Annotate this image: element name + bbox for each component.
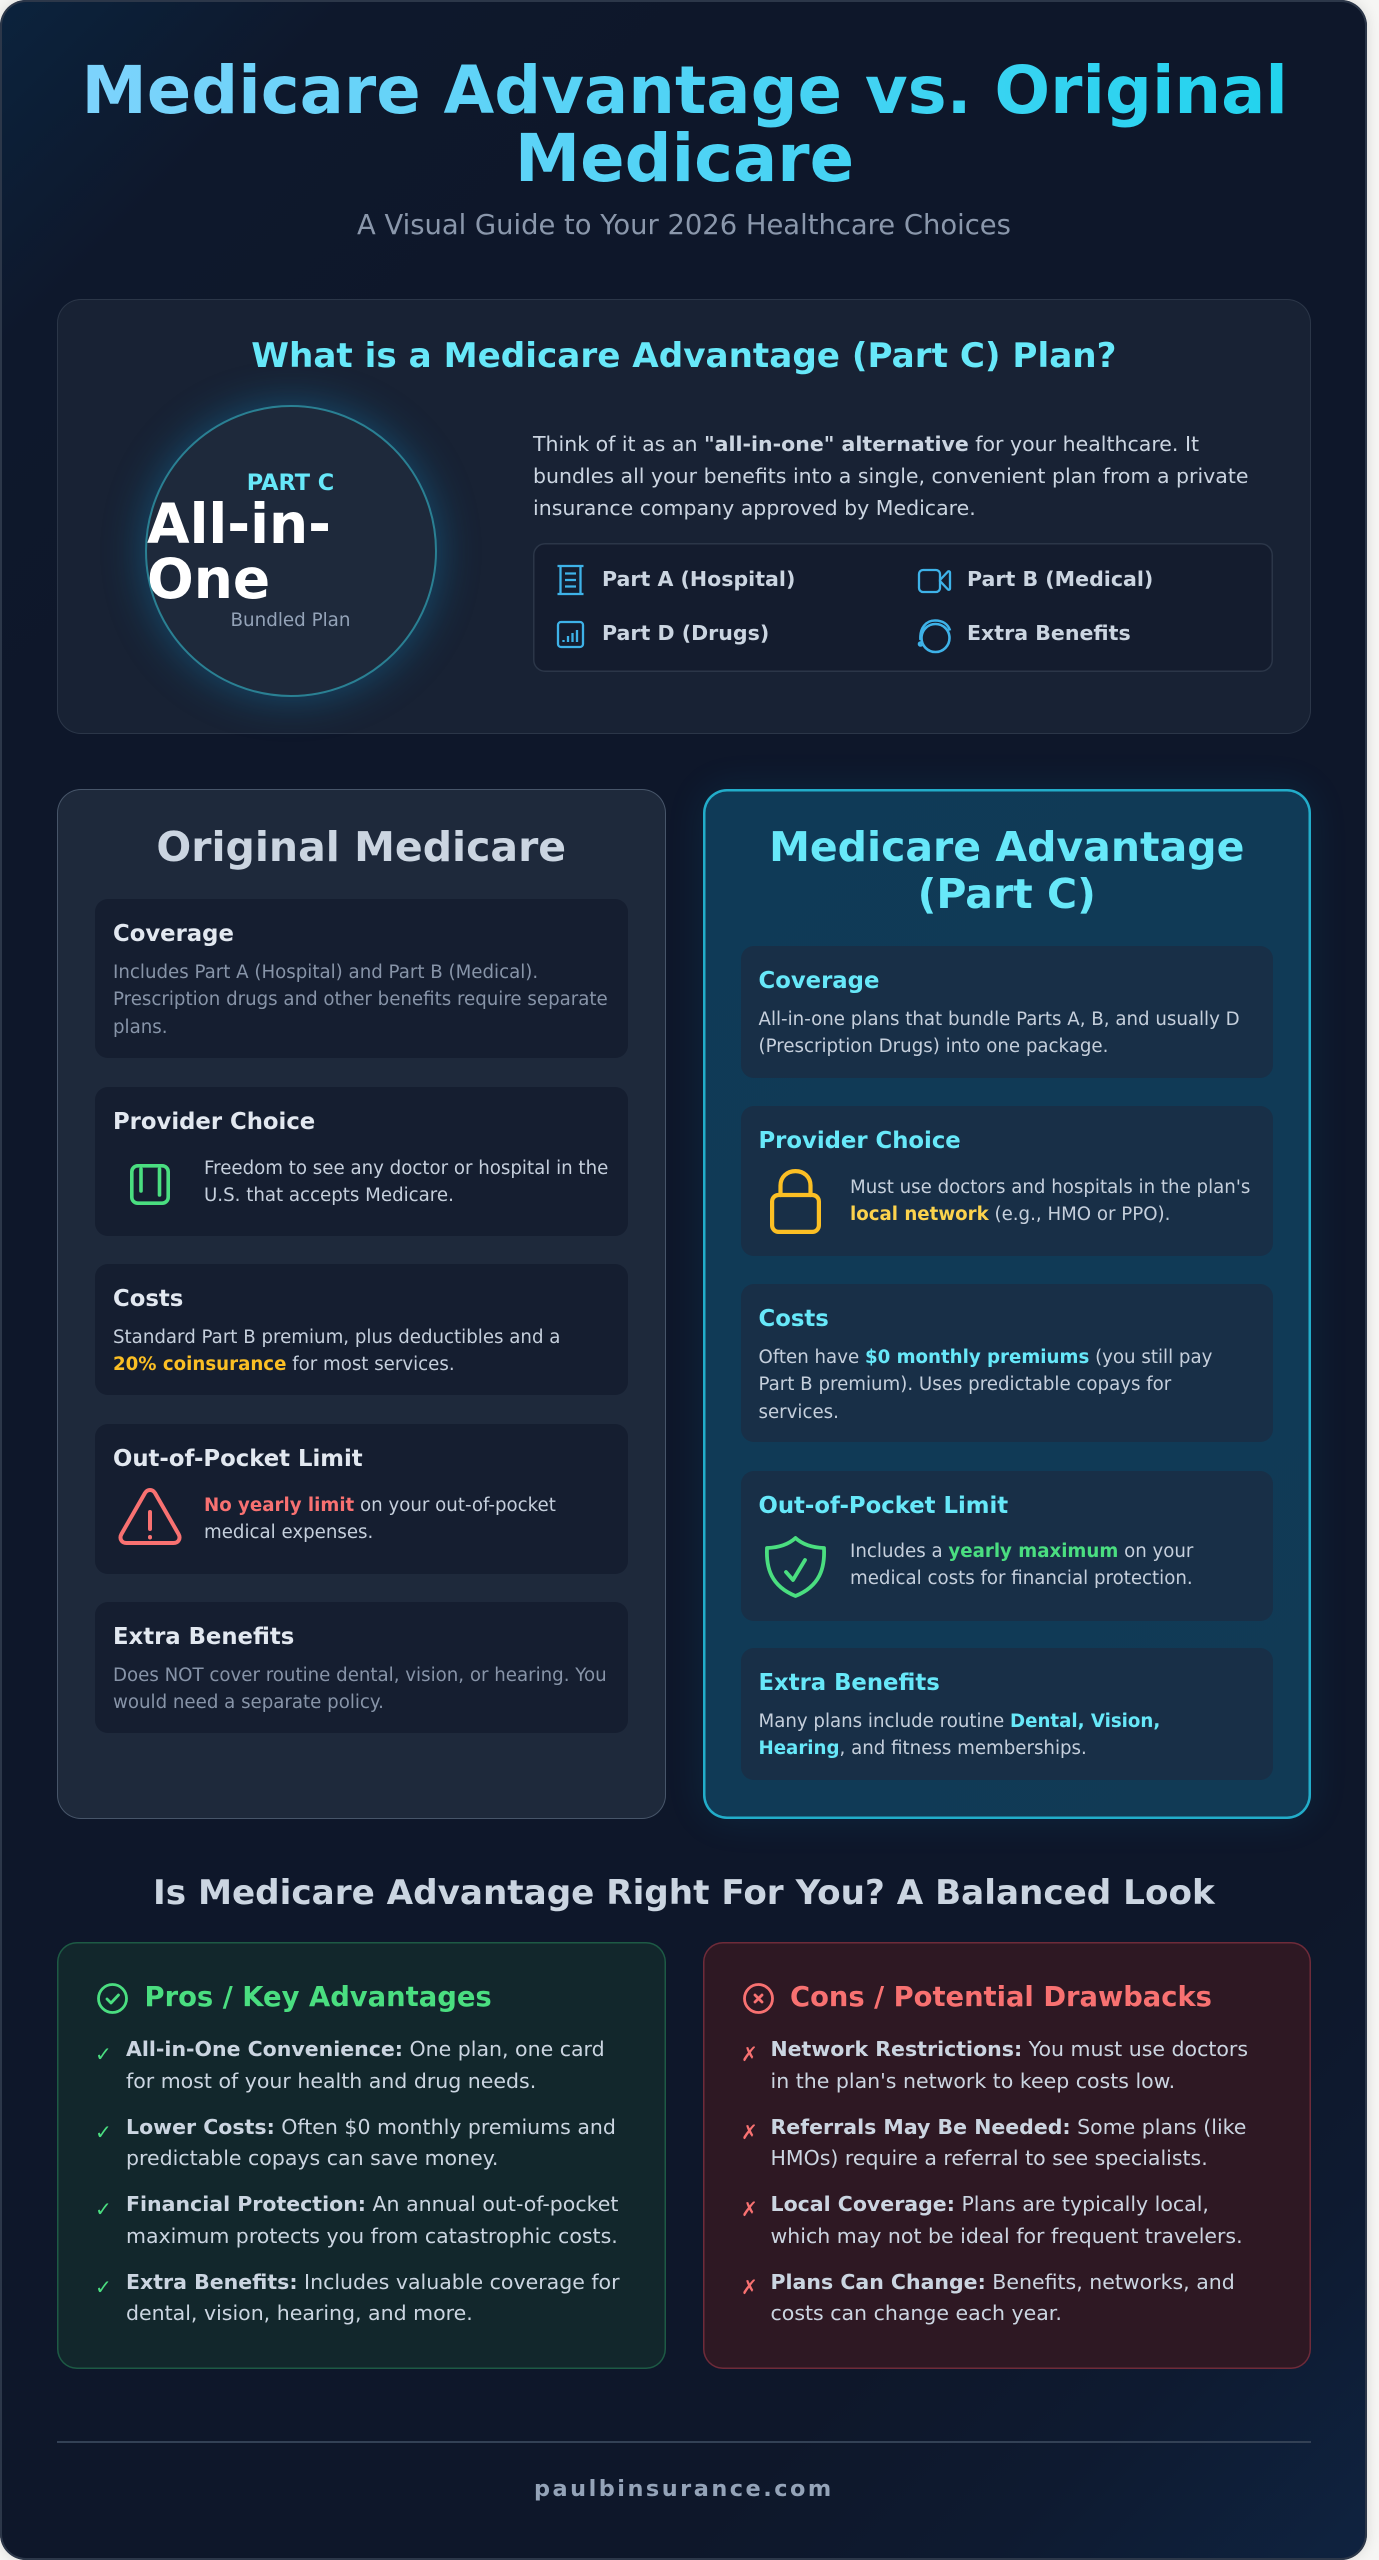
icon: extra benefits ring [918,619,952,654]
pro text: for most of your health and drug needs. [126,2069,536,2093]
con text: costs can change each year. [770,2301,1062,2325]
card title: Costs [758,1306,829,1332]
pro item: lower costs [95,2114,616,2170]
card: out-of-pocket limit [740,1471,1273,1621]
con text [770,2270,1235,2325]
card: costs [95,1264,628,1395]
card text: (Prescription Drugs) into one package. [758,1036,1108,1057]
text block: definition [532,432,1249,520]
panel: medicare advantage [702,789,1311,1819]
card: coverage [95,899,628,1058]
card text: would need a separate policy. [113,1692,384,1713]
pro text: Extra Benefits: Includes valuable coverage for [126,2270,620,2294]
card title: Out-of-Pocket Limit [113,1446,363,1472]
heading: what is part C: What is a Medicare Advantage (Part C) Plan? [251,336,1116,376]
panel: cons [702,1942,1311,2369]
card text [113,962,608,1038]
badge headline: all-in-one: One [147,547,270,611]
pro text [126,2270,620,2325]
con text: in the plan's network to keep costs low. [770,2069,1175,2093]
card text: medical costs for financial protection. [850,1568,1193,1589]
card text [758,1009,1240,1057]
heading: medicare advantage: Medicare Advantage [769,823,1244,871]
card text: Includes Part A (Hospital) and Part B (Medical). [113,962,538,983]
con text [770,2114,1246,2170]
card: out-of-pocket limit [95,1424,628,1574]
label: part B: Part B (Medical) [967,567,1153,591]
card text: Many plans include routine Dental, Vision, [758,1711,1160,1732]
icon: part D chart [556,620,584,648]
card text: All-in-one plans that bundle Parts A, B, and usually D [758,1009,1240,1030]
pro text [126,2037,605,2093]
card title: Coverage [113,921,234,947]
x mark: ✗ [741,2197,758,2221]
label: part D: Part D (Drugs) [602,621,769,645]
x mark: ✗ [741,2120,758,2144]
icon: warning triangle [118,1488,182,1545]
pro item: financial protection [95,2192,618,2248]
con text [770,2192,1243,2248]
card: extra benefits [740,1648,1273,1780]
icon: x circle [743,1983,774,2014]
text block: definition: Think of it as an "all-in-one" alternative for your healthcare. It [533,432,1199,456]
card text: U.S. that accepts Medicare. [204,1185,454,1206]
text block: definition: bundles all your benefits into a single, convenient plan from a private [533,464,1249,488]
card text: Part B premium). Uses predictable copays for [758,1374,1171,1395]
card text: Must use doctors and hospitals in the plan's [850,1177,1250,1198]
card text [113,1327,560,1375]
card text [850,1541,1194,1589]
card title: Out-of-Pocket Limit [758,1493,1008,1519]
card: coverage [740,946,1273,1078]
icon: check circle [97,1983,128,2014]
con item: network [741,2037,1248,2093]
con item: local coverage [741,2192,1243,2248]
card text [758,1711,1160,1759]
card: provider choice [740,1106,1273,1256]
card text [758,1347,1212,1423]
card title: Coverage [758,968,879,994]
card text: Prescription drugs and other benefits require separate [113,989,608,1010]
card: costs [740,1284,1273,1442]
pro item: extra benefits [95,2270,620,2325]
panel: original medicare [57,789,666,1819]
card text [113,1665,607,1713]
x mark: ✗ [741,2042,758,2066]
card text: Standard Part B premium, plus deductibles and a [113,1327,560,1348]
con text: Local Coverage: Plans are typically local, [770,2192,1209,2216]
subtitle: A Visual Guide to Your 2026 Healthcare Choices [357,210,1011,241]
con text: HMOs) require a referral to see specialists. [770,2146,1208,2170]
pro text: maximum protects you from catastrophic costs. [126,2224,618,2248]
pro text: predictable copays can save money. [126,2146,498,2170]
title: Medicare Advantage vs. Original [82,53,1288,129]
card title: Extra Benefits [758,1670,940,1696]
icon: shield check [765,1536,826,1598]
panel: pros [57,1942,666,2369]
panel: bundled parts list [533,543,1273,672]
card text: 20% coinsurance for most services. [113,1354,455,1375]
card text: plans. [113,1017,168,1038]
badge headline: all-in-one [147,492,331,611]
icon: part B video [918,568,952,594]
card text: Includes a yearly maximum on your [850,1541,1193,1562]
check mark: ✓ [95,2120,112,2144]
card text [850,1177,1250,1225]
icon: green book [130,1164,170,1205]
con text: Network Restrictions: You must use doctors [770,2037,1248,2061]
pro text: Lower Costs: Often $0 monthly premiums and [126,2114,616,2138]
con text: Referrals May Be Needed: Some plans (like [770,2114,1246,2138]
card title: Costs [113,1286,183,1312]
check mark: ✓ [95,2042,112,2066]
title [82,57,1288,193]
card text: Freedom to see any doctor or hospital in the [204,1158,608,1179]
circle: all-in-one badge [145,405,437,697]
card title: Provider Choice [758,1128,961,1154]
check mark: ✓ [95,2275,112,2299]
pro item: convenience [95,2037,605,2093]
badge headline: all-in-one: All-in- [147,492,331,556]
heading: medicare advantage: (Part C) [918,870,1096,918]
label: part A: Part A (Hospital) [602,567,795,591]
card text [204,1494,556,1543]
label: extra benefits: Extra Benefits [967,621,1131,645]
check mark: ✓ [95,2197,112,2221]
con item: plans change [741,2270,1235,2325]
card: extra benefits [95,1602,628,1733]
card: provider choice [95,1087,628,1236]
heading: balanced look: Is Medicare Advantage Right For You? A Balanced Look [153,1873,1215,1913]
con text [770,2037,1248,2093]
card text [204,1158,608,1206]
con text: which may not be ideal for frequent travelers. [770,2224,1243,2248]
heading: original medicare: Original Medicare [156,823,566,871]
pros heading: Pros / Key Advantages [144,1982,492,2013]
footer website: paulbinsurance.com [534,2476,834,2502]
card text: services. [758,1402,839,1423]
card text: Often have $0 monthly premiums (you still pay [758,1347,1212,1368]
con item: referrals [741,2114,1246,2170]
con text: Plans Can Change: Benefits, networks, and [770,2270,1235,2294]
icon: padlock [770,1169,821,1234]
card text: medical expenses. [204,1522,373,1543]
panel: what is Medicare Advantage [57,299,1311,734]
card text: Does NOT cover routine dental, vision, or hearing. You [113,1665,607,1686]
pro text: dental, vision, hearing, and more. [126,2301,473,2325]
card title: Extra Benefits [113,1624,294,1650]
badge label: part C: PART C [247,470,334,496]
card text: No yearly limit on your out-of-pocket [204,1494,556,1516]
badge caption: bundled plan: Bundled Plan [231,610,350,631]
card title: Provider Choice [113,1109,315,1135]
cons heading: Cons / Potential Drawbacks [790,1982,1212,2013]
text block: definition: insurance company approved by Medicare. [533,496,976,520]
title: Medicare [515,121,854,197]
heading: medicare advantage [769,823,1244,918]
pro text: Financial Protection: An annual out-of-pocket [126,2192,618,2216]
pro text [126,2114,616,2170]
card text: local network (e.g., HMO or PPO). [850,1204,1170,1225]
card text: Hearing, and fitness memberships. [758,1738,1087,1759]
icon: part A document [558,564,584,596]
pro text [126,2192,618,2248]
pro text: All-in-One Convenience: One plan, one card [126,2037,605,2061]
x mark: ✗ [741,2275,758,2299]
